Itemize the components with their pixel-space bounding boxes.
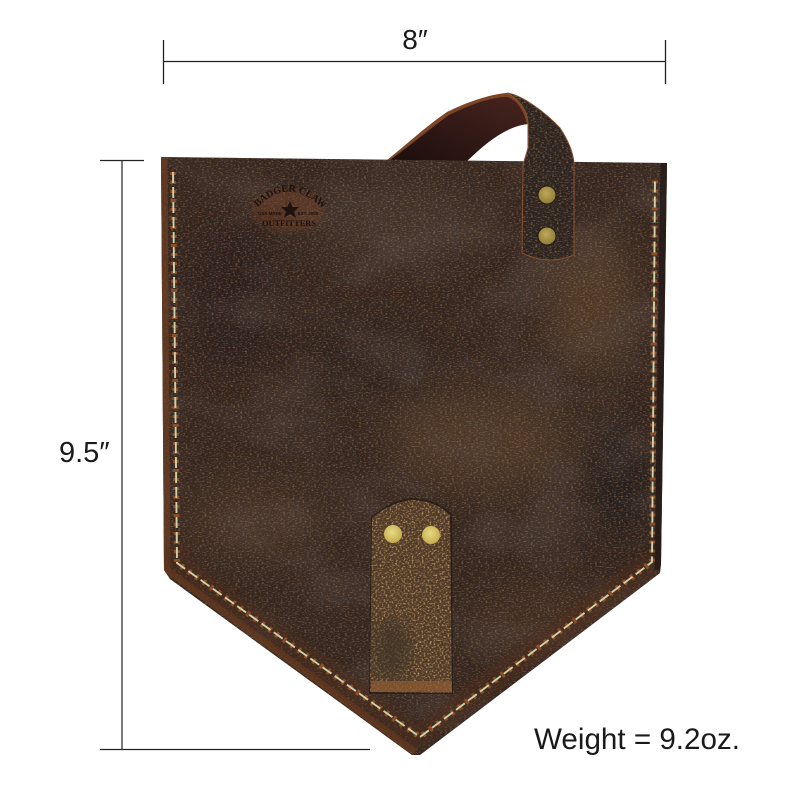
width dimension: 8 inches: 8″ xyxy=(402,24,428,55)
embossed maker's stamp: USA MADE xyxy=(258,211,282,216)
pouch body xyxy=(150,150,680,760)
embossed maker's stamp: BADGER CLAW xyxy=(253,184,328,207)
embossed maker's stamp: EST. 2009 xyxy=(298,211,319,216)
hand stitching xyxy=(173,172,655,737)
leather handle loop xyxy=(387,93,528,161)
tonal patches on leather xyxy=(180,180,650,650)
rear belt tab with rivets xyxy=(369,498,453,694)
left and lower worn edges xyxy=(164,157,415,752)
height dimension: 9.5 inches: 9.5″ xyxy=(59,437,110,469)
rivet xyxy=(422,526,440,544)
rivet xyxy=(538,227,556,245)
rivet xyxy=(384,525,402,543)
weight label: Weight = 9.2oz. xyxy=(534,723,740,756)
embossed maker's stamp xyxy=(251,184,328,232)
handle strap end with rivets xyxy=(505,90,577,265)
rivet xyxy=(538,186,556,204)
overall darkening tone xyxy=(150,150,680,760)
embossed maker's stamp: OUTFITTERS xyxy=(262,218,316,228)
